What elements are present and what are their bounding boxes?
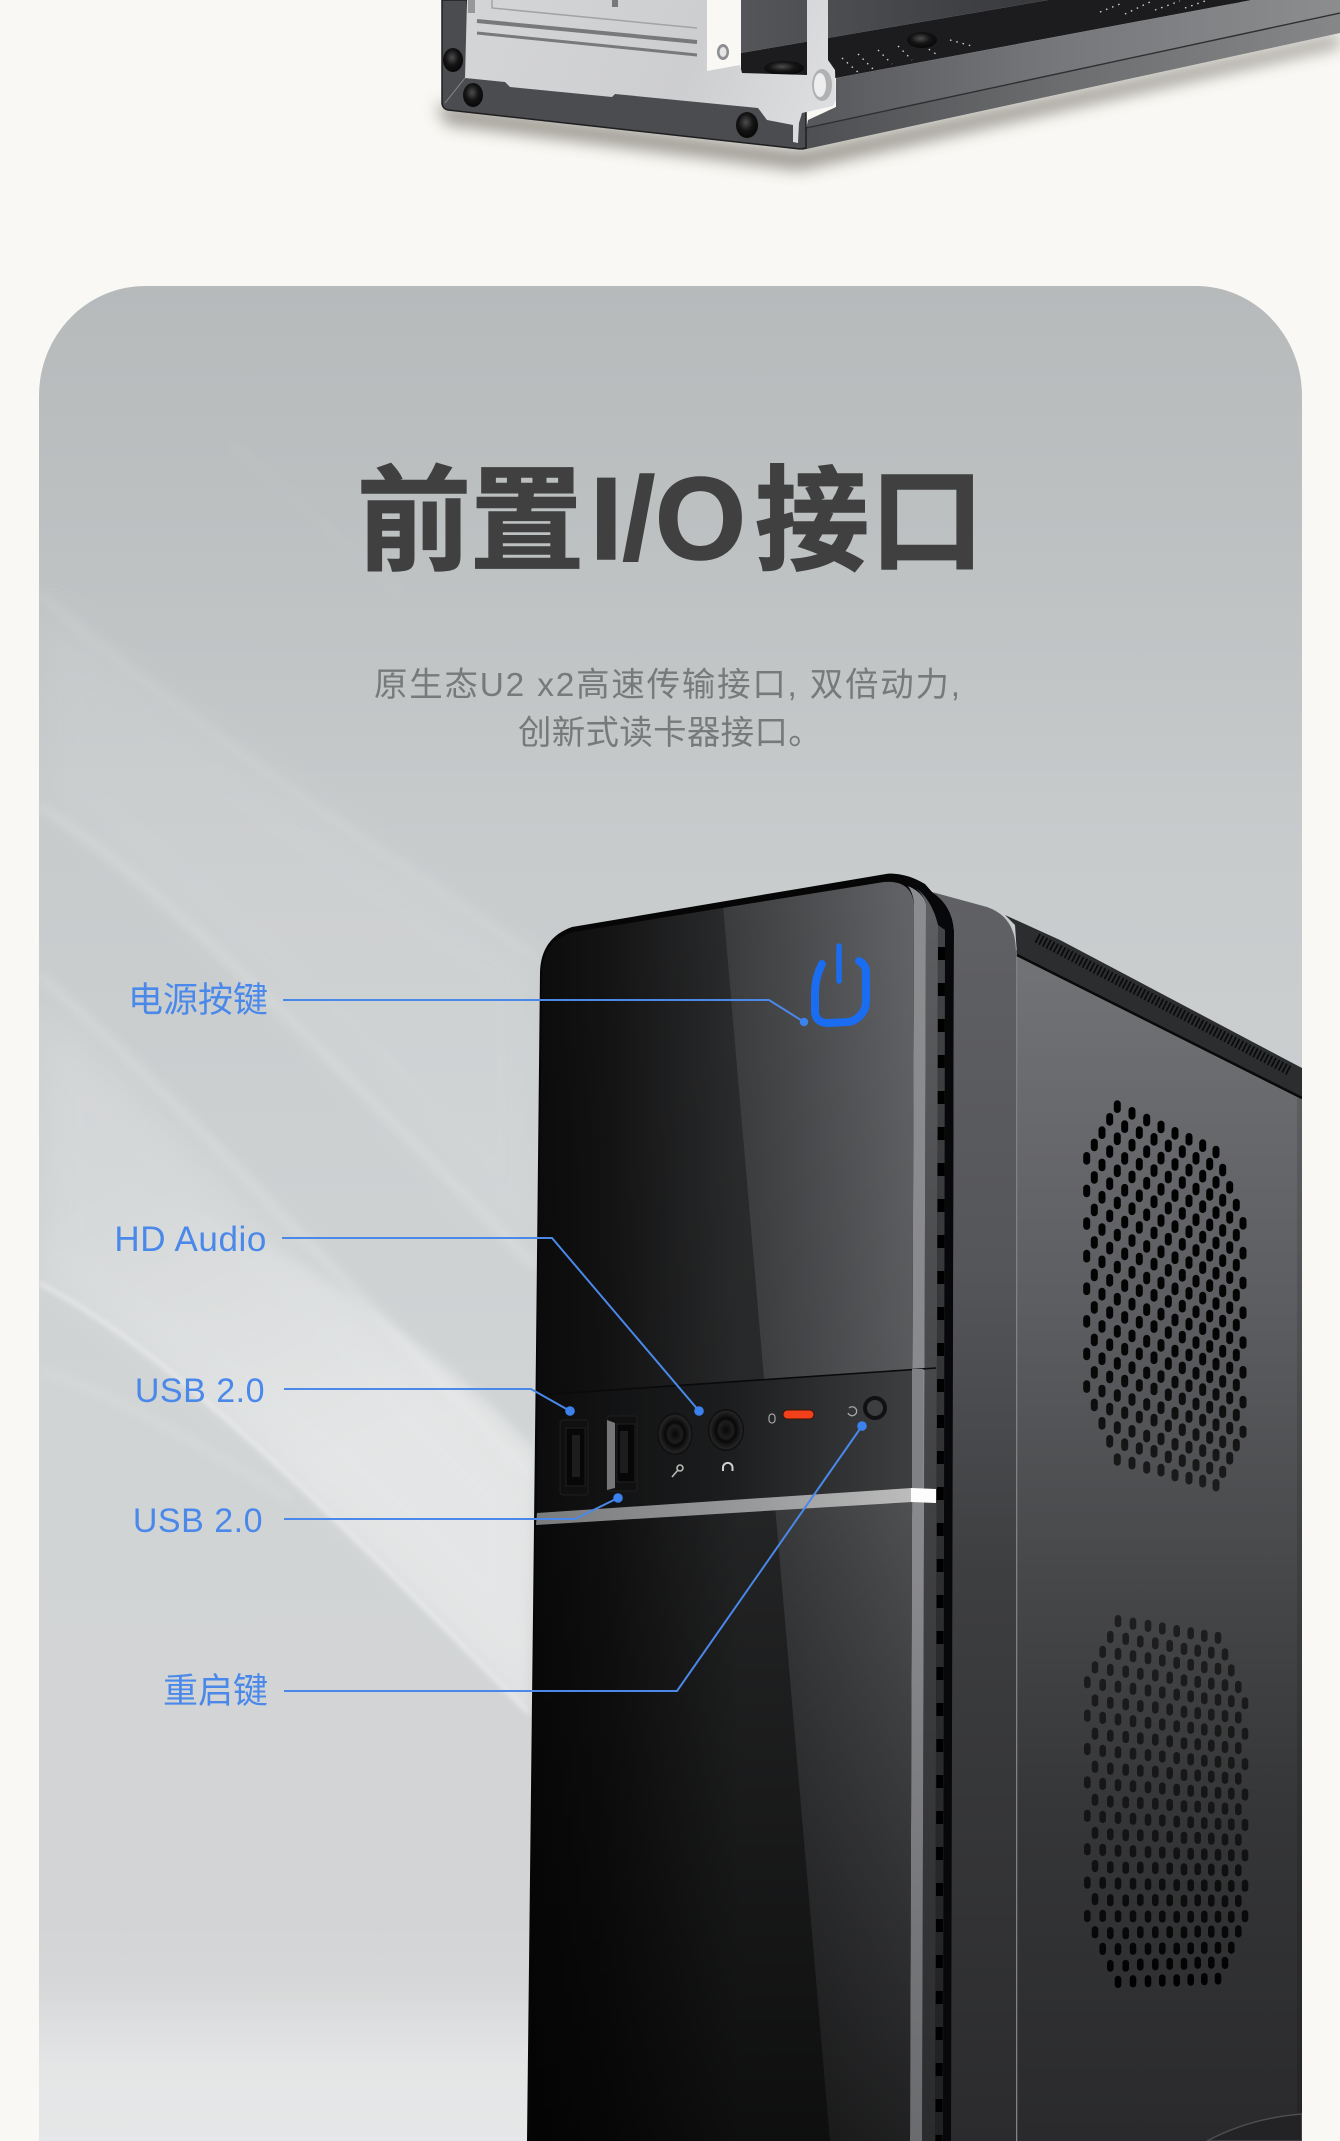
white stripe end bbox=[911, 1488, 936, 1503]
title: 接 bbox=[755, 459, 869, 586]
callout: HD Audio bbox=[114, 1220, 704, 1416]
microphone jack bbox=[658, 1413, 692, 1455]
chassis floor bbox=[741, 0, 1252, 78]
face vertical darkening bbox=[520, 870, 920, 2141]
dark strip of bezel bbox=[916, 888, 938, 2141]
post rivet bbox=[812, 69, 832, 101]
leader line: reset button bbox=[284, 1426, 862, 1691]
floor standoffs bbox=[764, 32, 937, 75]
leader line: power button bbox=[283, 1000, 804, 1022]
label: power button: 电源按键 bbox=[128, 981, 268, 1020]
black backing behind bezel and side band bbox=[886, 874, 954, 2141]
rail seam bbox=[806, 13, 1340, 128]
dot: power button bbox=[800, 1018, 808, 1026]
callout: USB 2.0 upper bbox=[135, 1372, 575, 1416]
label: HD Audio: HD Audio bbox=[114, 1220, 267, 1259]
background light streaks bbox=[39, 812, 534, 1713]
frame corner fold bbox=[445, 78, 465, 103]
dot: USB 2.0 upper bbox=[565, 1406, 575, 1416]
headphone jack bbox=[708, 1409, 744, 1451]
title: I/O bbox=[590, 453, 746, 584]
icon: blue power symbol bbox=[815, 946, 866, 1023]
I/O band body bbox=[537, 1369, 912, 1513]
plate etched outline bbox=[492, 0, 697, 28]
side panel foot curve bbox=[1207, 2114, 1302, 2141]
louver slots bbox=[1037, 938, 1290, 1071]
front I/O band bbox=[536, 1368, 936, 1525]
dot: reset button bbox=[857, 1421, 867, 1431]
icon: microphone bbox=[672, 1465, 683, 1477]
title: 口 bbox=[870, 459, 984, 586]
leader line: HD Audio bbox=[282, 1238, 699, 1411]
title: 置 bbox=[470, 459, 584, 586]
silver front plate bbox=[465, 0, 836, 143]
I/O band top seam bbox=[538, 1368, 936, 1395]
icon: reset bbox=[848, 1407, 857, 1416]
icon: headphones bbox=[723, 1463, 732, 1471]
leader line: USB 2.0 lower bbox=[284, 1498, 618, 1519]
silver stripe bbox=[536, 1488, 912, 1525]
side panel of the PC case bbox=[1016, 950, 1302, 2141]
description text bbox=[374, 667, 960, 752]
LED indicator bbox=[783, 1410, 814, 1419]
USB port left bbox=[560, 1420, 588, 1495]
reset button bbox=[863, 1396, 887, 1420]
product image: open chassis base at top bbox=[436, 0, 1340, 170]
dark front frame bbox=[442, 0, 806, 149]
leader line: USB 2.0 upper bbox=[284, 1389, 570, 1411]
light vertical bezel strip bbox=[908, 886, 926, 2141]
bezel vent slots bbox=[939, 947, 942, 2141]
icon: HDD indicator bbox=[769, 1414, 775, 1423]
callout: power button bbox=[128, 981, 808, 1026]
bracket screw hole bbox=[717, 44, 729, 60]
side vent: lower perforation bbox=[1087, 1618, 1245, 1985]
plate slot bbox=[612, 0, 618, 7]
side vent: upper perforation bbox=[1087, 1104, 1243, 1488]
side front band bbox=[932, 892, 1016, 2141]
face reflection area bbox=[720, 870, 915, 2141]
chassis interior wall bbox=[741, 0, 1048, 53]
callout: reset button bbox=[163, 1421, 867, 1711]
chassis side wall bbox=[806, 0, 1340, 130]
label: USB 2.0 lower: USB 2.0 bbox=[133, 1502, 263, 1540]
label: USB 2.0 upper: USB 2.0 bbox=[135, 1372, 265, 1410]
black silhouette of front face bbox=[527, 874, 914, 2141]
bottom glow bbox=[39, 2044, 528, 2141]
title: 前 bbox=[357, 459, 471, 586]
plate grooves bbox=[477, 21, 697, 55]
vent strip shade bbox=[935, 925, 945, 2141]
plate left cut-out bbox=[468, 0, 475, 13]
description line 1: 原生态U2 x2高速传输接口, 双倍动力, bbox=[374, 667, 960, 704]
black frame screws bbox=[443, 48, 758, 138]
face left dark area bbox=[558, 882, 914, 2141]
USB port right bbox=[607, 1416, 637, 1491]
strip over band bbox=[912, 1369, 923, 1488]
chassis ground shadow bbox=[436, 34, 1340, 170]
side panel right edge band bbox=[1297, 1098, 1302, 1676]
chassis lower rail bbox=[800, 13, 1340, 150]
floor dotted holes bbox=[842, 1, 1205, 74]
side panel left highlight bbox=[1016, 955, 1018, 2141]
glossy front face bbox=[558, 882, 914, 2141]
dot: USB 2.0 lower bbox=[613, 1493, 623, 1503]
floor vent patches bbox=[925, 2, 1240, 78]
top rail with louvers bbox=[1005, 915, 1302, 1098]
dot: HD Audio bbox=[694, 1406, 704, 1416]
callout: USB 2.0 lower bbox=[133, 1493, 623, 1540]
description line 2: 创新式读卡器接口。 bbox=[518, 715, 822, 752]
label: reset button: 重启键 bbox=[163, 1672, 268, 1711]
